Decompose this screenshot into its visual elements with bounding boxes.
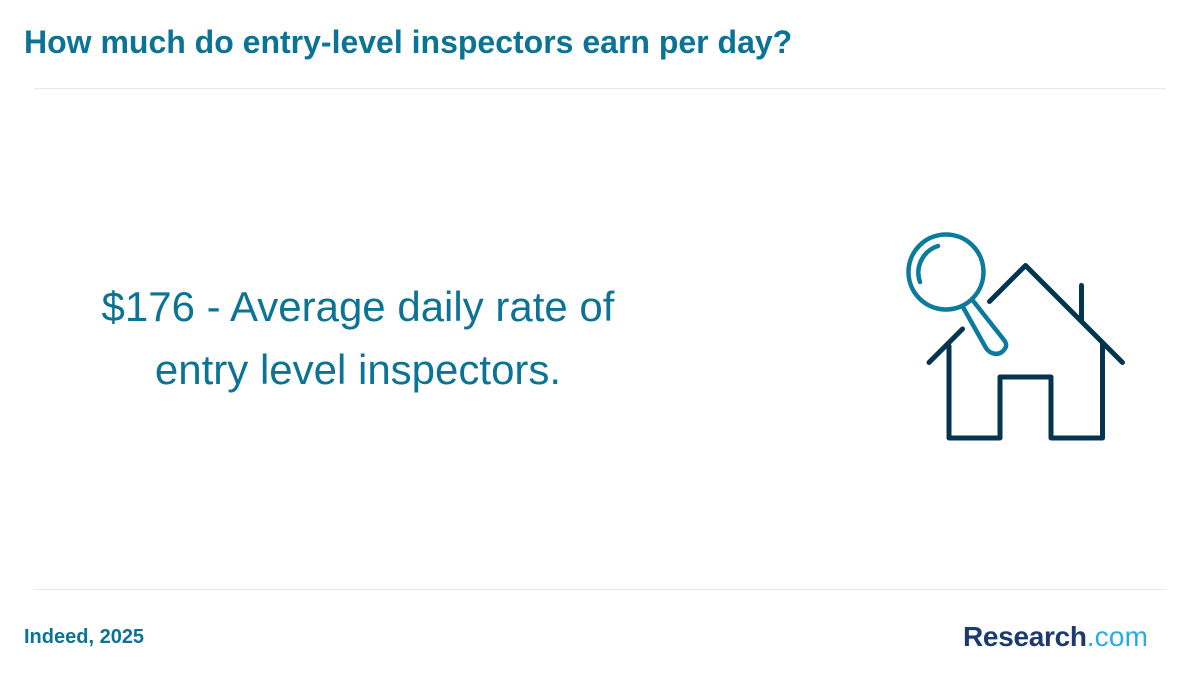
- source: Indeed, 2025: [24, 626, 144, 648]
- logo: Research.com: Research.com: [963, 621, 1148, 652]
- icon: house: [929, 266, 1122, 438]
- icon: house with magnifying glass: [906, 232, 1125, 440]
- main statistic text: $176 - Average daily rate of: [102, 283, 614, 330]
- main statistic text: entry level inspectors.: [155, 346, 561, 393]
- main statistic text: [102, 283, 614, 393]
- title: How much do entry-level inspectors earn per day?: [24, 24, 792, 60]
- icon: magnifying glass: [908, 234, 1006, 354]
